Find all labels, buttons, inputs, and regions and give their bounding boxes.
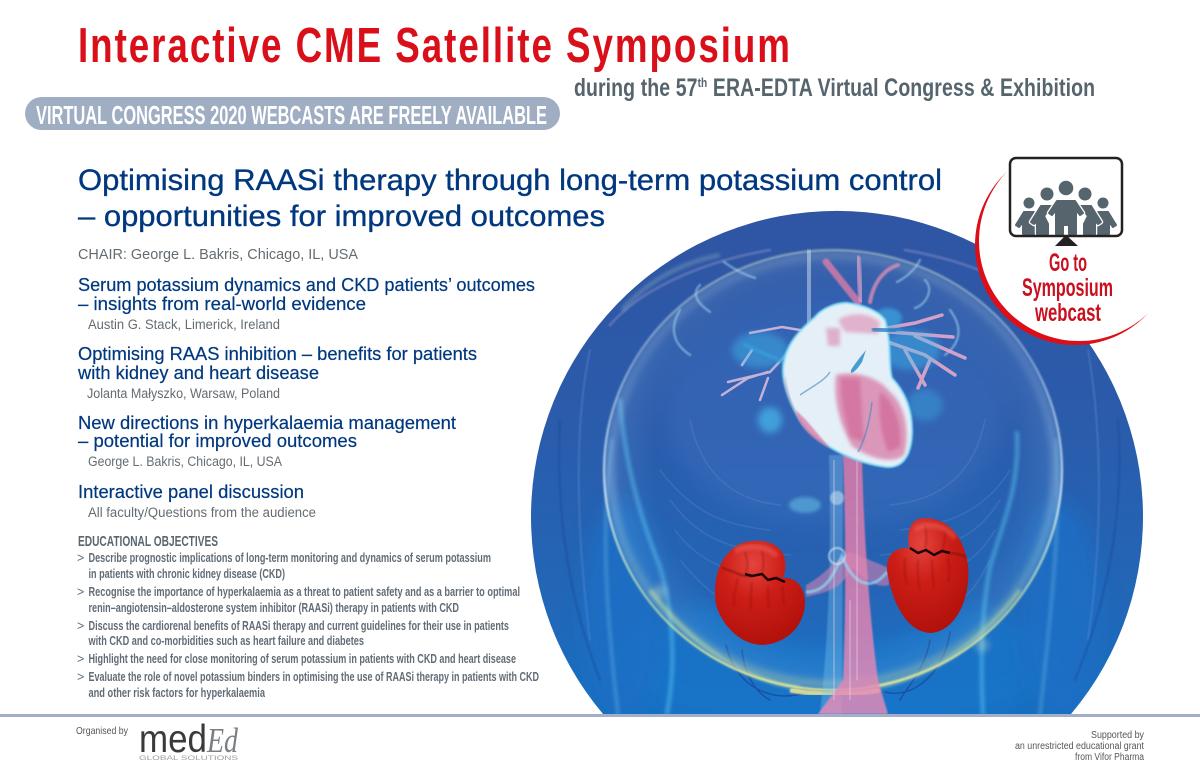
educational objectives: Discuss the cardiorenal benefits of RAASi therapy and current guidelines for their use in patients (88, 619, 509, 633)
heart (783, 303, 912, 467)
kidney right: boxing glove (887, 518, 968, 633)
educational objectives: and other risk factors for hyperkalaemia (88, 686, 266, 700)
symposium heading: Optimising RAASi therapy through long-term potassium control (78, 164, 942, 197)
webcast callout (975, 141, 1179, 345)
educational objectives: > (77, 670, 84, 684)
talk 4: Interactive panel discussion (78, 482, 304, 502)
subtitle: ERA-EDTA Virtual Congress & Exhibition (707, 74, 1095, 102)
callout label: webcast (1034, 299, 1101, 327)
educational objectives: renin–angiotensin–aldosterone system inhibitor (RAASi) therapy in patients with CKD (88, 601, 459, 615)
talk 3: George L. Bakris, Chicago, IL, USA (88, 454, 282, 469)
educational objectives: Recognise the importance of hyperkalaemia as a threat to patient safety and as a barrier to optimal (88, 585, 520, 599)
educational objectives: > (77, 585, 84, 599)
talk 3: New directions in hyperkalaemia management (78, 413, 456, 433)
logo: medEd Global Solutions: GLOBAL SOLUTIONS (139, 756, 238, 762)
educational objectives: > (77, 652, 84, 666)
talk 3: – potential for improved outcomes (78, 431, 357, 451)
educational objectives: EDUCATIONAL OBJECTIVES (78, 533, 218, 549)
callout label (1022, 249, 1113, 327)
subtitle: during the 57 (574, 74, 698, 102)
anatomical illustration: heart and kidneys in body (530, 210, 1150, 730)
educational objectives: with CKD and co-morbidities such as heart failure and diabetes (88, 634, 364, 648)
title: Interactive CME Satellite Symposium (78, 19, 790, 73)
talk 3 (78, 413, 456, 469)
symposium heading (78, 164, 942, 233)
sponsor credit: an unrestricted educational grant (1015, 741, 1144, 752)
talk 4 (78, 482, 316, 520)
talk 1: – insights from real-world evidence (78, 294, 366, 314)
sponsor credit: Supported by (1091, 730, 1144, 741)
red crescent (975, 145, 1175, 345)
sponsor credit: from Vifor Pharma (1075, 752, 1144, 763)
callout label: Symposium (1022, 274, 1113, 302)
white disc (979, 141, 1179, 341)
educational objectives: > (77, 619, 84, 633)
subtitle: th (698, 76, 707, 90)
talk 2: Optimising RAAS inhibition – benefits for patients (78, 344, 477, 364)
educational objectives: in patients with chronic kidney disease (CKD) (88, 567, 285, 581)
talk 4: All faculty/Questions from the audience (88, 505, 316, 520)
symposium heading: – opportunities for improved outcomes (78, 200, 605, 233)
talk 2 (77, 344, 477, 401)
logo: medEd Global Solutions: Ed (206, 721, 238, 760)
talk 1: Serum potassium dynamics and CKD patients’ outcomes (78, 275, 535, 295)
talk 2: Jolanta Małyszko, Warsaw, Poland (87, 386, 280, 401)
callout label: Go to (1049, 249, 1087, 277)
vessel glow (732, 308, 943, 513)
talk 1: Austin G. Stack, Limerick, Ireland (88, 317, 280, 332)
footer divider (0, 714, 1200, 717)
talk 2: with kidney and heart disease (77, 363, 319, 383)
kidney left: boxing glove (715, 541, 805, 645)
icon: monitor with audience (1010, 158, 1122, 246)
webcast availability banner: VIRTUAL CONGRESS 2020 WEBCASTS ARE FREELY AVAILABLE (36, 102, 547, 130)
body tone (582, 290, 1100, 730)
educational objectives (77, 533, 539, 700)
glass sphere (604, 250, 1062, 694)
aorta and vena cava (806, 455, 889, 714)
logo: medEd Global Solutions: med (139, 718, 207, 761)
chair: CHAIR: George L. Bakris, Chicago, IL, USA (78, 246, 358, 263)
educational objectives: Describe prognostic implications of long-term monitoring and dynamics of serum potassium (88, 551, 491, 565)
webcast availability banner (25, 97, 560, 130)
educational objectives: Evaluate the role of novel potassium binders in optimising the use of RAASi therapy in patients with CKD (88, 670, 539, 684)
talk 1 (78, 275, 535, 332)
organiser credit: Organised by (76, 725, 129, 737)
upper vessels (674, 255, 965, 400)
educational objectives: Highlight the need for close monitoring of serum potassium in patients with CKD and heart disease (88, 652, 516, 666)
sponsor credit (1015, 730, 1144, 763)
educational objectives: > (77, 551, 84, 565)
body contour (559, 250, 1119, 714)
